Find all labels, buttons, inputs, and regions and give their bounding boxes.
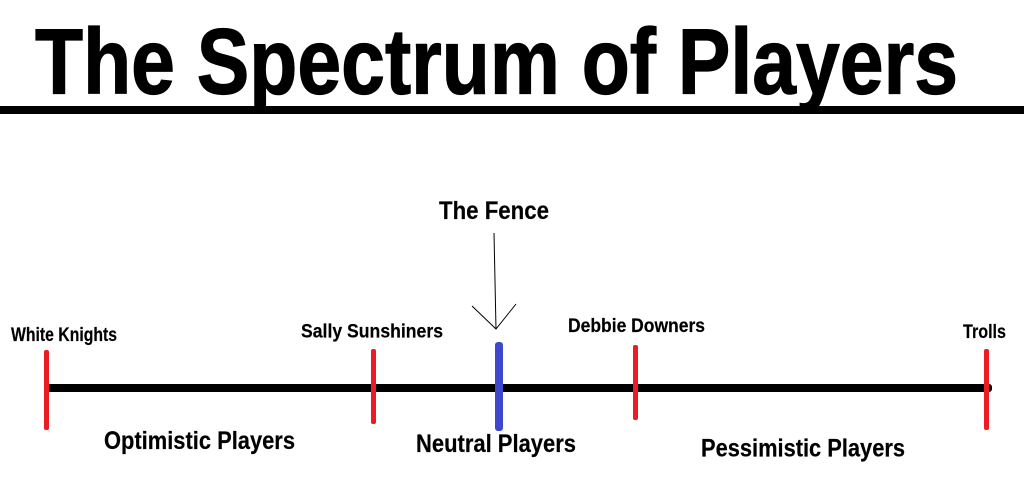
label: Pessimistic Players: Pessimistic Players [701,434,905,462]
spectrum axis [46,384,992,392]
label: Optimistic Players: Optimistic Players [104,427,295,455]
marker: Sally Sunshiners: Sally Sunshiners [301,320,443,342]
title underline [0,106,1024,114]
marker: neutral fence [495,342,503,431]
marker: Trolls: Trolls [963,321,1006,343]
marker: Sally Sunshiners [301,320,443,424]
marker: Debbie Downers [568,315,705,420]
marker: Trolls [963,321,1006,430]
marker: White Knights: White Knights [11,324,117,346]
heading: The Fence: The Fence [439,197,549,225]
arrow: fence pointer [472,233,516,329]
label: Neutral Players: Neutral Players [416,430,576,458]
marker: White Knights [11,324,117,430]
marker: Debbie Downers: Debbie Downers [568,315,705,337]
